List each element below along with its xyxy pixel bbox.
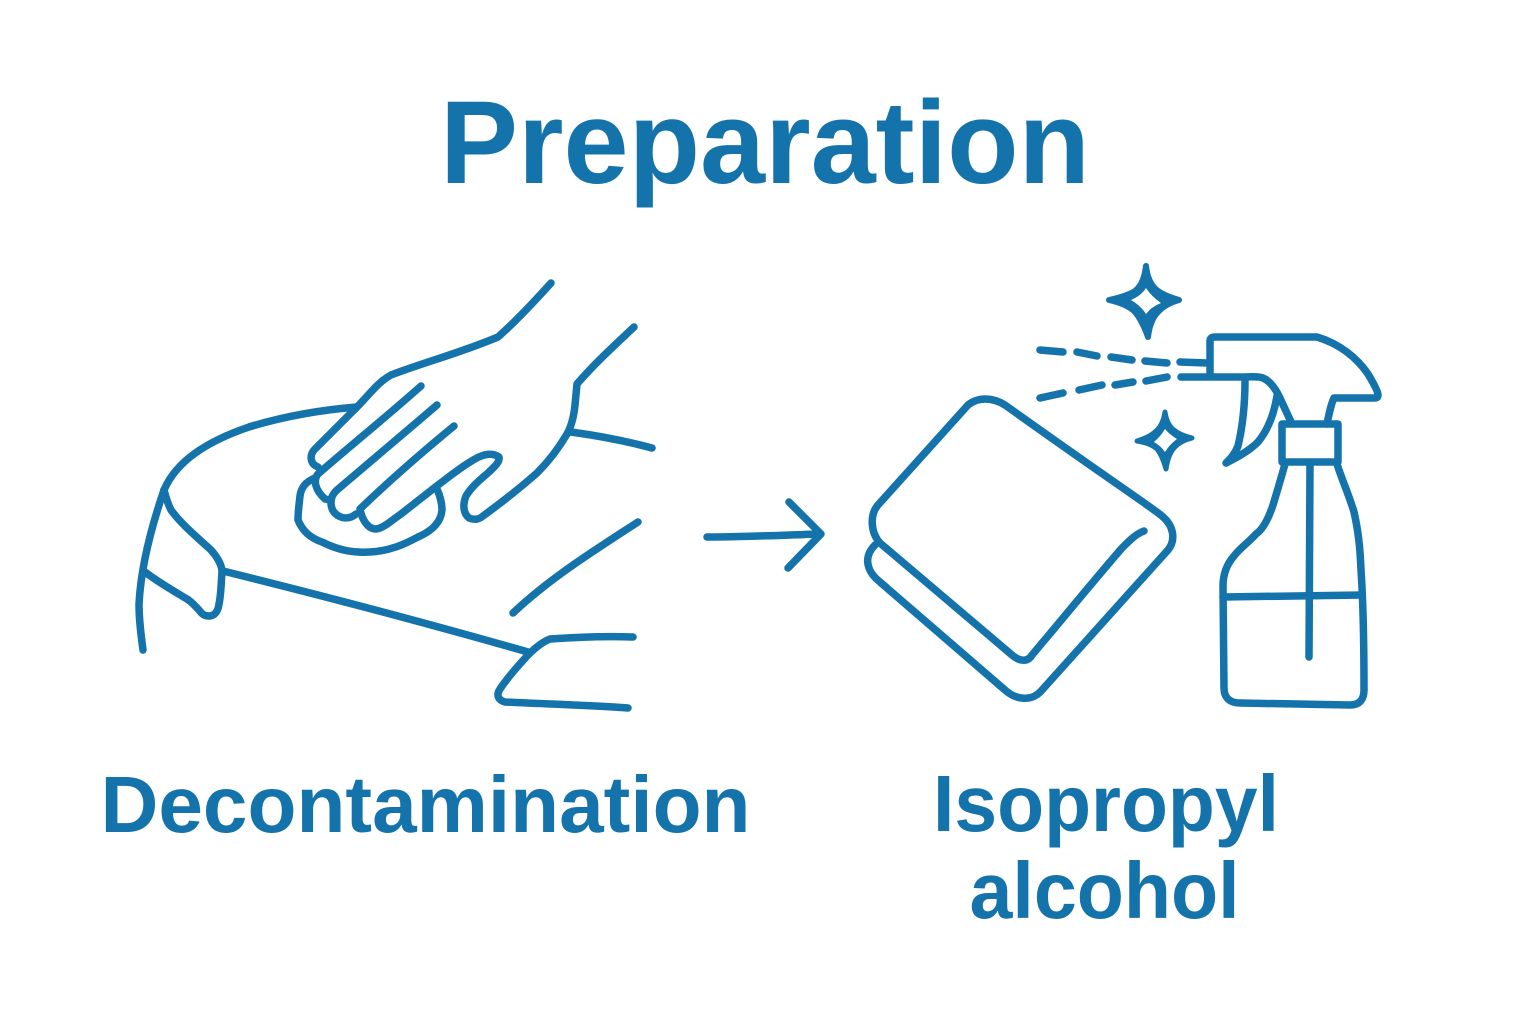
label: isopropyl alcohol: Isopropyl (933, 759, 1279, 848)
icon: sparkles (1109, 266, 1192, 469)
title: Preparation (440, 77, 1090, 209)
label: decontamination: Decontamination (100, 760, 750, 849)
icon: folded cloth (868, 399, 1173, 698)
icon: spray bottle (1181, 337, 1378, 705)
icon: spray mist (1040, 350, 1207, 398)
label: isopropyl alcohol (933, 759, 1279, 935)
icon: hand wiping surface with cloth (139, 283, 652, 708)
label: isopropyl alcohol: alcohol (970, 846, 1240, 935)
arrow (707, 502, 821, 568)
